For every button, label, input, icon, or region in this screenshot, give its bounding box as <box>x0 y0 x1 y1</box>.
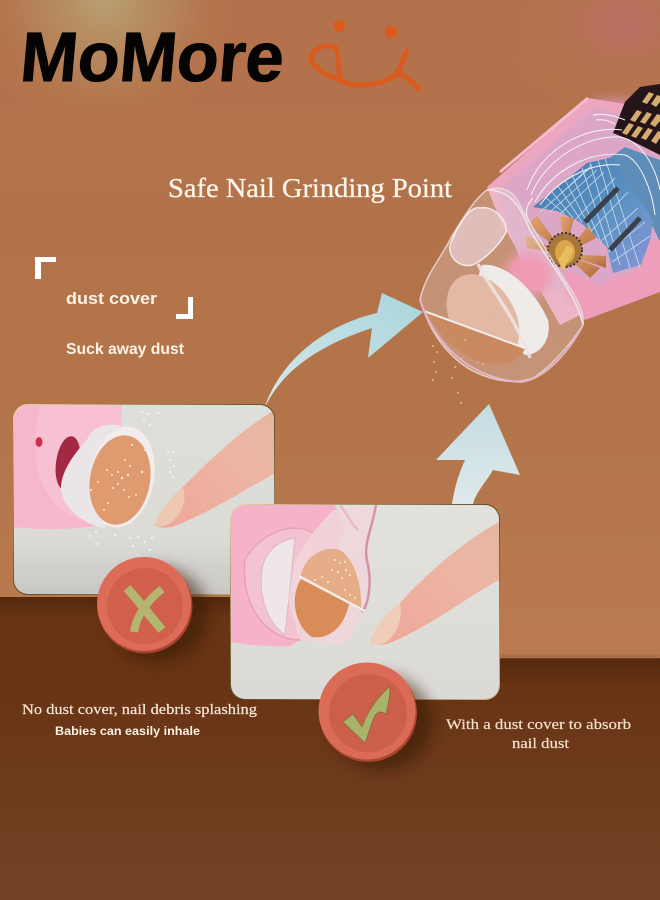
callout: dust cover <box>35 257 193 358</box>
arrow: up to device <box>436 404 520 504</box>
check mark <box>343 686 390 743</box>
logo: MoMore: MoMore <box>18 18 287 96</box>
rear coil <box>600 147 660 242</box>
interior <box>497 108 660 293</box>
cover clip <box>288 505 376 645</box>
bottom-right bracket <box>176 297 193 319</box>
divider <box>299 576 365 611</box>
white wire arcs <box>526 114 660 222</box>
panel: with dust cover <box>230 504 500 700</box>
debris on pad <box>90 444 146 511</box>
logo: MoMore <box>18 18 419 96</box>
white filter ring <box>470 265 549 355</box>
circuit board <box>613 84 660 155</box>
finger <box>370 522 499 645</box>
panel: no dust cover <box>13 404 275 595</box>
blurred rear of body <box>592 96 635 120</box>
fingernail <box>370 603 401 644</box>
sub label: Suck away dust <box>66 341 184 358</box>
label: dust cover <box>66 289 157 308</box>
badge: cross <box>97 557 208 662</box>
pink device <box>14 405 122 529</box>
peach pad in cover <box>432 261 534 375</box>
cover bottom edge <box>420 300 583 382</box>
inner s-curve highlight <box>478 264 530 358</box>
lower pad half <box>428 312 525 365</box>
lower brown floor <box>0 597 660 900</box>
transparent dust cover <box>420 188 583 382</box>
divider <box>424 311 530 350</box>
sub text: Babies can easily inhale <box>55 724 200 738</box>
debris on pad <box>314 559 356 599</box>
text: no dust cover: No dust cover, nail debris splashing <box>22 702 258 718</box>
falling dust <box>432 309 496 404</box>
pink glow inside cover <box>504 253 552 297</box>
text: with dust cover: With a dust cover to absorb <box>446 717 631 733</box>
panel frame <box>13 404 275 595</box>
text: with dust cover <box>446 717 631 752</box>
coil dark slots <box>585 188 640 250</box>
peach pad upper half <box>300 549 361 610</box>
cross mark <box>127 588 162 632</box>
transparent ring <box>244 528 315 640</box>
badge: check <box>318 662 432 770</box>
white disc ring <box>106 426 155 528</box>
copper rotor <box>525 216 606 278</box>
finger <box>155 410 275 528</box>
peach pad lower half <box>295 579 349 637</box>
red indicator light <box>36 437 42 447</box>
panel background <box>231 505 499 699</box>
blue coil <box>533 157 653 273</box>
peach sanding pad <box>89 435 151 525</box>
title: Safe Nail Grinding Point <box>168 173 453 203</box>
top-left bracket <box>35 257 56 279</box>
red motor throat <box>56 436 80 488</box>
pink body <box>487 98 660 325</box>
flying debris <box>89 411 175 556</box>
arrow: curved to device <box>264 293 423 409</box>
pink lower lip <box>565 240 660 320</box>
body top ridge <box>500 98 588 172</box>
device cutaway <box>420 84 660 404</box>
panel frame <box>230 504 500 700</box>
second line: nail dust <box>512 736 570 752</box>
cover right edge <box>487 190 583 325</box>
disc cylinder side <box>61 425 120 528</box>
cover loop tab <box>450 208 506 266</box>
text: no dust cover <box>22 702 258 738</box>
panel background <box>14 405 274 594</box>
fingernail <box>155 488 185 526</box>
icon: orange smile <box>311 20 419 89</box>
pink device <box>231 505 345 646</box>
